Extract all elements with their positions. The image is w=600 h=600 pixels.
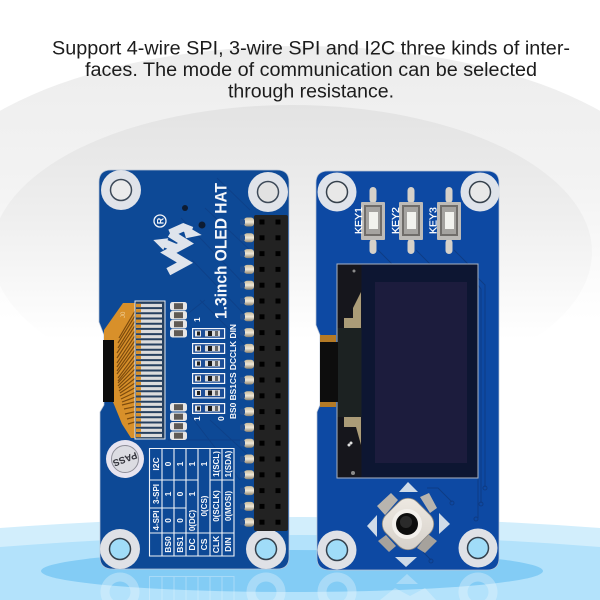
logo: registered mark: R [156, 217, 166, 224]
board body [316, 171, 499, 570]
interface mode table: 1 [163, 491, 173, 496]
interface mode table: 0 [175, 491, 185, 496]
interface mode table: 0(MOSI) [224, 491, 233, 521]
5-way joystick [377, 493, 439, 555]
interface mode table: 0 [175, 518, 185, 523]
40-pin GPIO header [240, 215, 288, 531]
resistor labels: BS0 BS1CS DCCLK DIN [228, 324, 238, 419]
button labels: KEY3 [428, 207, 440, 234]
circuit traces [168, 178, 250, 480]
interface mode table: DIN [223, 537, 233, 552]
mounting holes [318, 172, 500, 570]
interface mode table: 0(DC) [188, 510, 197, 531]
selection resistor blocks [193, 329, 225, 413]
interface mode table: 1 [199, 461, 209, 466]
button KEY2 [399, 187, 423, 254]
traces [378, 250, 485, 560]
PASS sticker [106, 440, 144, 478]
interface mode table: 0(CS) [200, 495, 209, 516]
interface mode table: 1 [187, 461, 197, 466]
background: blue water ellipses [0, 517, 600, 600]
tactile buttons [361, 187, 461, 254]
interface mode table: BS1 [175, 536, 185, 553]
panel: front of OLED HAT board [316, 171, 500, 570]
resistor labels [192, 317, 238, 421]
logo: Waveshare mark [153, 223, 202, 272]
OLED display module [320, 264, 478, 478]
flexible ribbon cable [103, 303, 138, 438]
interface mode table: DC [187, 538, 197, 551]
button KEY1 [361, 187, 385, 254]
interface mode table: CLK [211, 535, 221, 553]
button labels [353, 207, 440, 234]
interface mode table: 0 [163, 518, 173, 523]
FPC solder pads [135, 301, 165, 439]
resistor labels: 1 [192, 317, 202, 322]
heading: interface description: through resistance. [228, 82, 394, 102]
small capacitors bottom [170, 403, 187, 440]
interface mode table: 1 [187, 491, 197, 496]
resistor labels: 1 [192, 416, 202, 421]
interface mode table: 3-SPI [152, 484, 161, 504]
heading: interface description: Support 4-wire SPI, 3-wire SPI and I2C three kinds of inter- [52, 38, 570, 60]
display ribbon [338, 265, 362, 477]
board body [99, 170, 289, 569]
interface mode table: 4-SPI [152, 510, 161, 531]
button KEY3 [437, 187, 461, 254]
vias [182, 205, 206, 228]
mounting holes [100, 170, 288, 569]
board title: 1.3inch OLED HAT [212, 183, 230, 319]
interface mode table: 1(SCL) [212, 451, 221, 477]
background: grey inner dome [0, 105, 592, 399]
interface mode table: I2C [151, 457, 161, 471]
button labels: KEY2 [390, 207, 402, 234]
interface mode table: 1(SDA) [224, 450, 233, 477]
interface mode table: CS [199, 538, 209, 550]
logo: registered mark [154, 215, 166, 227]
interface mode table: 0 [163, 461, 173, 466]
resistor labels: 0 [216, 416, 226, 421]
interface mode table: BS0 [163, 536, 173, 553]
small capacitors top [170, 302, 187, 338]
navigation arrows [367, 482, 450, 567]
interface mode table: 0(SCLK) [212, 490, 221, 522]
trace vias [429, 486, 487, 563]
flexible ribbon cable: J0 [121, 311, 127, 318]
heading: interface description [52, 38, 570, 102]
PASS sticker: PASS [111, 449, 139, 468]
board reflections on water [101, 573, 498, 600]
background: grey outer dome [0, 46, 600, 382]
interface mode table [150, 448, 234, 556]
heading: interface description: faces. The mode of communication can be selected [85, 60, 537, 81]
panel: back of OLED HAT board [99, 170, 289, 569]
interface mode table: 1 [175, 461, 185, 466]
button labels: KEY1 [353, 207, 365, 234]
